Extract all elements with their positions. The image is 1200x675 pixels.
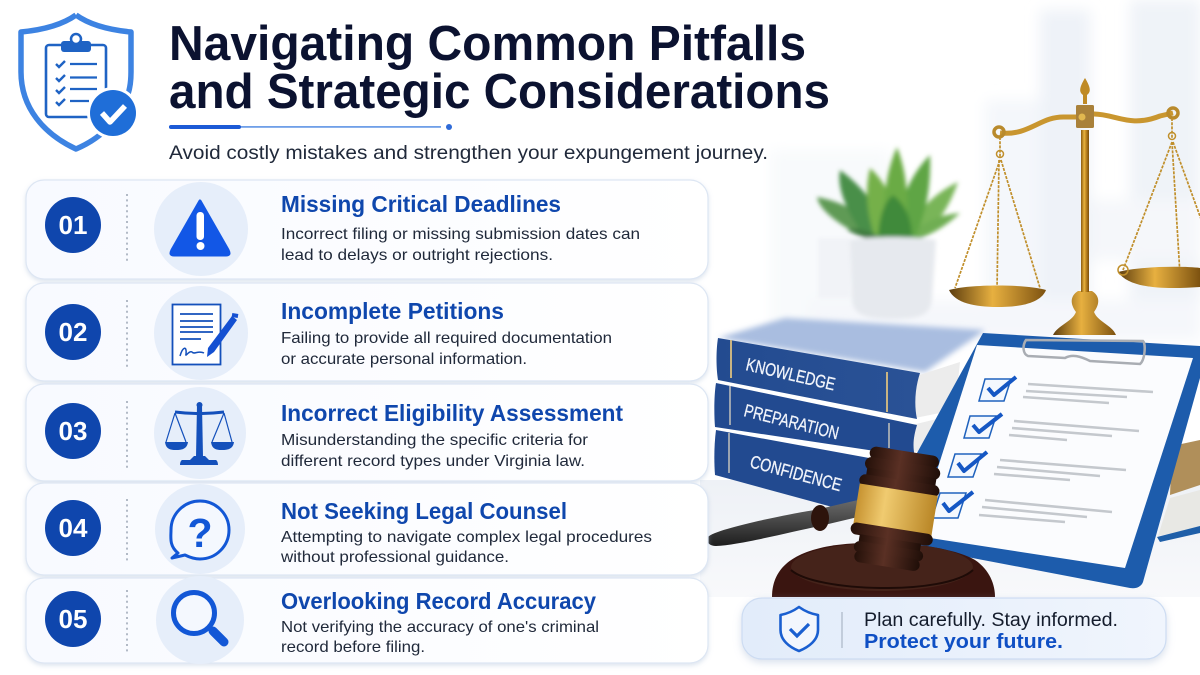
card 3: incorrect eligibility assessment: 03 [59,416,87,446]
icon: shield check [780,607,818,651]
icon: shield with clipboard [21,15,139,149]
golden balance scale [949,78,1200,335]
card 2: incomplete petitions: or accurate personal information. [281,351,527,368]
blurred office background [770,0,1200,350]
card 5: overlooking record accuracy: 05 [59,604,87,634]
callout: protect your future [742,598,1166,659]
card 2: incomplete petitions: Incomplete Petitions [281,298,504,324]
checklist row 2 [964,414,1139,440]
stack of books [714,318,1200,542]
scale base and post [1053,78,1116,335]
icon: magnifying glass [174,592,224,642]
right pan and chains [1118,118,1200,288]
gavel head [846,445,946,573]
card 4: not seeking legal counsel [26,483,708,575]
title [169,16,830,119]
subtitle: Avoid costly mistakes and strengthen your expungement journey. [169,142,768,164]
card 1: missing critical deadlines [26,180,708,279]
card 5: overlooking record accuracy: Overlooking Record Accuracy [281,588,596,614]
icon: question speech bubble: ? [187,510,213,556]
judge's gavel and sound block [707,445,995,597]
card 4: not seeking legal counsel: without professional guidance. [280,549,509,566]
sound block [772,543,995,597]
card 5: overlooking record accuracy: record before filing. [281,639,425,656]
metal clip [1024,340,1145,364]
scale beam [1000,113,1173,133]
book top cover [718,318,985,372]
card 2: incomplete petitions: Failing to provide all required documentation [281,330,612,347]
card 1: missing critical deadlines: 01 [59,210,87,240]
book: confidence: CONFIDENCE [748,452,844,495]
decorative plant: blurred green plant in white pot [817,147,960,319]
card 2: incomplete petitions [26,283,708,381]
card 4: not seeking legal counsel: Attempting to navigate complex legal procedures [281,529,652,546]
book: knowledge: KNOWLEDGE [744,354,837,394]
card 1: missing critical deadlines: Incorrect filing or missing submission dates can [281,226,640,243]
paper [918,345,1193,568]
card 1: missing critical deadlines: Missing Critical Deadlines [281,191,561,217]
card 5: overlooking record accuracy [26,576,708,664]
right-side books [1157,440,1200,542]
card 4: not seeking legal counsel: 04 [59,513,88,543]
card 4: not seeking legal counsel: Not Seeking Legal Counsel [281,498,567,524]
book: knowledge [716,338,960,419]
clipboard checklist [917,333,1200,588]
callout: protect your future: Protect your future. [864,631,1063,653]
title: Navigating Common Pitfalls [169,16,806,71]
callout: protect your future: Plan carefully. Stay informed. [864,610,1118,631]
icon: scales of justice [165,402,234,465]
book: preparation [714,383,945,457]
checklist row 3 [948,452,1126,480]
left pan and chains [949,137,1046,307]
card 5: overlooking record accuracy: Not verifying the accuracy of one's criminal [281,619,599,636]
card 2: incomplete petitions: 02 [59,317,87,347]
icon: warning triangle [171,201,229,255]
title: and Strategic Considerations [169,64,830,119]
title underline [169,124,452,130]
book: confidence [714,430,880,520]
card 3: incorrect eligibility assessment: Incorrect Eligibility Assessment [281,400,623,426]
checklist row 4 [932,492,1112,522]
card 1: missing critical deadlines: lead to delays or outright rejections. [281,247,553,264]
card 3: incorrect eligibility assessment [26,384,708,481]
clipboard board [917,333,1200,588]
checklist row 1 [979,377,1153,403]
book: preparation: PREPARATION [742,400,841,443]
icon: document and pen [172,304,238,364]
gavel handle [707,500,858,546]
white floor under photo [700,597,1200,675]
card 3: incorrect eligibility assessment: different record types under Virginia law. [281,453,585,470]
table surface [700,480,1200,597]
card 3: incorrect eligibility assessment: Misunderstanding the specific criteria for [281,432,589,449]
icon: question speech bubble [171,501,229,559]
